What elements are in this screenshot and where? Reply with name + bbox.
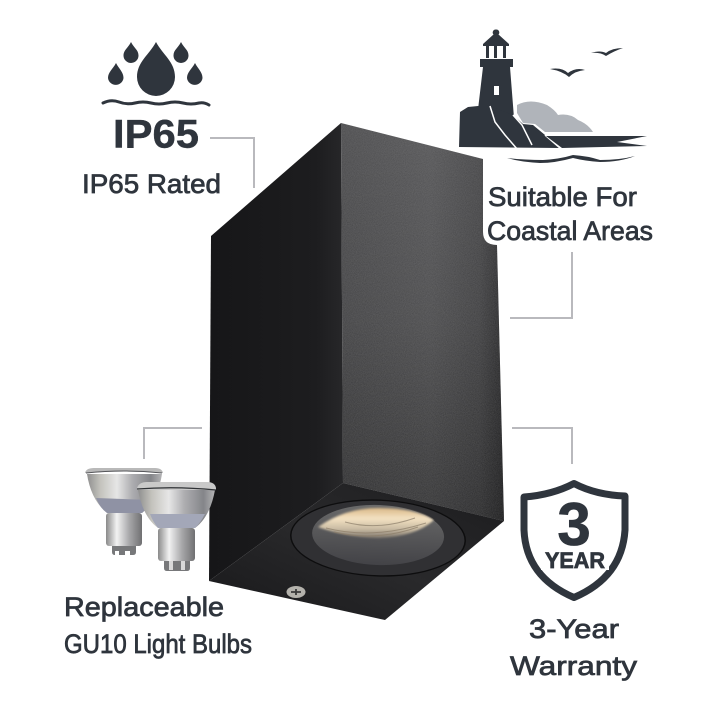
back bulb: [85, 468, 163, 555]
warm lamp glow: [318, 508, 434, 538]
icon: 3 year warranty shield: YEAR: [545, 548, 605, 573]
icon: water drops and wave: [103, 42, 209, 105]
left face of housing: [209, 123, 343, 581]
bird: [550, 68, 585, 77]
label: Suitable For Coastal Areas: Suitable For: [488, 182, 637, 212]
bird: [591, 48, 623, 56]
icon: GU10 bulbs: [85, 468, 216, 571]
icon: 3 year warranty shield: 3: [557, 491, 591, 558]
right face of housing: [341, 123, 504, 521]
cliff cracks: [490, 106, 560, 150]
front bulb: [137, 482, 216, 571]
icon: 3 year warranty shield: [524, 484, 625, 598]
lens ring: [289, 496, 467, 580]
label: Suitable For Coastal Areas: Coastal Areas: [487, 216, 653, 246]
cliff: [459, 106, 560, 148]
fixing screw: [286, 586, 306, 598]
label: 3-Year Warranty: [510, 614, 638, 681]
heading: IP65: IP65: [113, 112, 199, 156]
lower wave: [507, 155, 635, 163]
label: 3-Year Warranty: 3-Year: [529, 614, 619, 644]
lighthouse tower: [477, 29, 514, 118]
label: IP65 Rated: IP65 Rated: [82, 169, 221, 199]
icon: lighthouse on cliff with birds: [459, 29, 647, 163]
label: Suitable For Coastal Areas: [487, 182, 653, 246]
product: black wall light: [209, 123, 504, 620]
infographic: wall light features: [64, 30, 652, 681]
callout line: IP65: [210, 138, 254, 188]
lighthouse window: [494, 86, 499, 95]
sea: [546, 136, 647, 148]
label: Replaceable GU10 Light Bulbs: Replaceable: [64, 592, 224, 622]
label: Replaceable GU10 Light Bulbs: [64, 592, 252, 659]
label: 3-Year Warranty: Warranty: [510, 651, 638, 681]
callout line: warranty: [512, 428, 572, 464]
callout line: coastal: [510, 252, 572, 318]
cloud: [517, 102, 593, 132]
underside of housing: [209, 483, 504, 620]
label: Replaceable GU10 Light Bulbs: GU10 Light Bulbs: [64, 629, 252, 659]
callout line: bulbs: [144, 428, 202, 459]
